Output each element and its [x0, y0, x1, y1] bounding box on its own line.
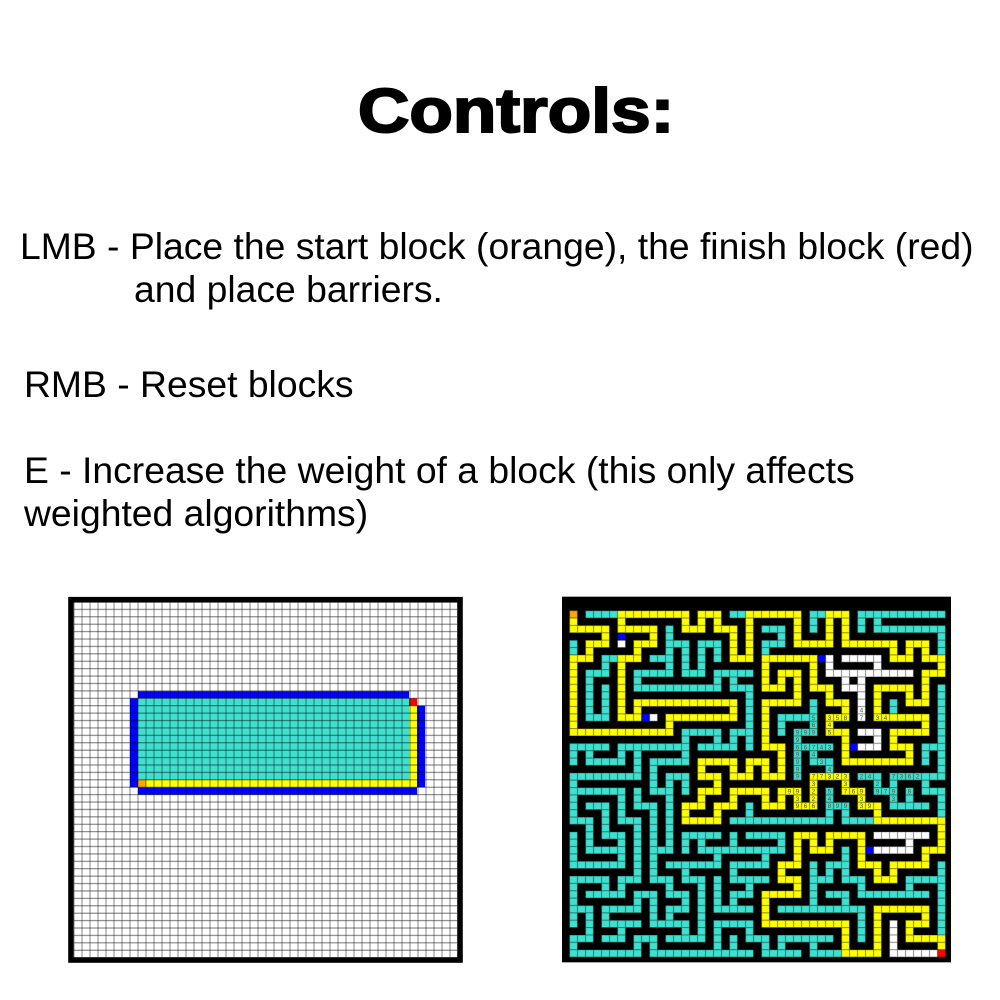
- explored area: [138, 698, 409, 780]
- frame: [71, 600, 460, 960]
- left barrier: [130, 698, 138, 787]
- text block: LMB control: [20, 225, 974, 310]
- finish block: [409, 698, 417, 706]
- maze: explored cells: [574, 614, 942, 953]
- start block: [138, 780, 146, 787]
- text block: E control: weighted algorithms): [24, 492, 368, 534]
- maze: cell grid: [570, 611, 946, 957]
- maze: solution path: [574, 614, 942, 953]
- text block: LMB control: and place barriers.: [134, 268, 443, 310]
- maze: start block: [572, 613, 575, 615]
- bottom barrier: [138, 787, 417, 795]
- text block: RMB control: RMB - Reset blocks: [24, 363, 354, 405]
- panel: maze with search: [562, 596, 951, 962]
- maze edge: [562, 596, 951, 962]
- maze: frontier blocks: [622, 637, 870, 850]
- text block: E control: E - Increase the weight of a block (this only affects: [24, 449, 855, 491]
- panel: open grid with rectangular search: [68, 597, 463, 963]
- maze: weight numbers: [788, 708, 920, 810]
- text block: E control: [24, 449, 855, 534]
- grid lines: [74, 602, 457, 957]
- right barrier: [417, 706, 425, 787]
- text block: LMB control: LMB - Place the start block (orange), the finish block (red): [20, 225, 974, 267]
- title: Controls:: [358, 77, 674, 146]
- shortest path: [146, 706, 417, 787]
- maze: finish block: [940, 952, 943, 954]
- top barrier: [138, 691, 409, 698]
- maze: unvisited open cells: [622, 644, 934, 953]
